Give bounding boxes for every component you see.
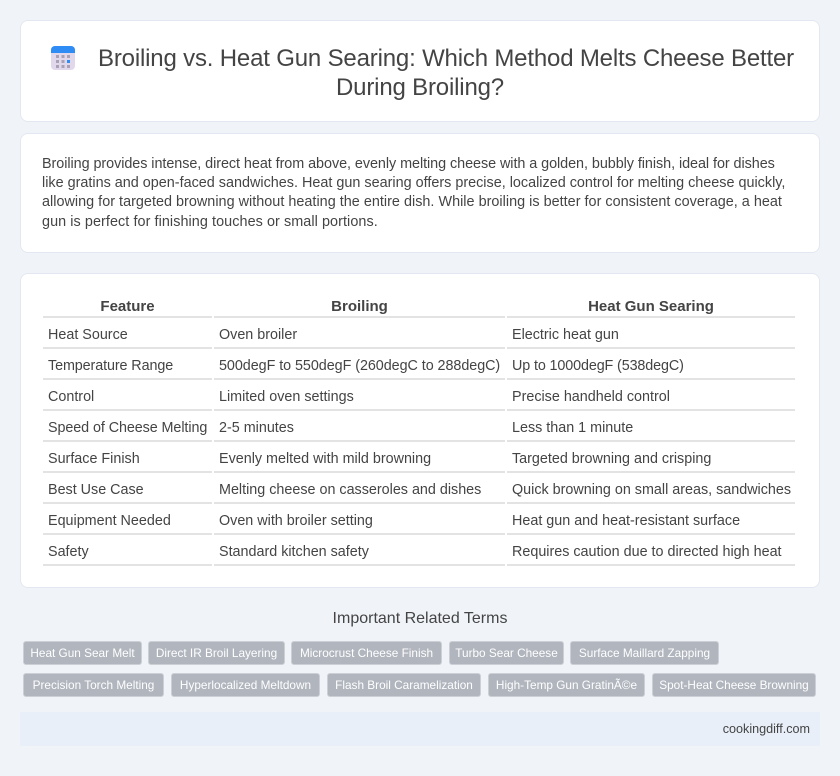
comparison table: Melting cheese on casseroles and dishes xyxy=(219,482,481,498)
comparison table: Precise handheld control xyxy=(512,389,670,405)
comparison table: Oven broiler xyxy=(219,327,297,343)
tag: Heat Gun Sear Melt xyxy=(30,646,135,660)
comparison table: Standard kitchen safety xyxy=(219,544,369,560)
title xyxy=(98,45,794,101)
comparison table: Evenly melted with mild browning xyxy=(219,451,431,467)
comparison table: 500degF to 550degF (260degC to 288degC) xyxy=(219,358,500,374)
comparison table: Heat Source xyxy=(48,327,128,343)
tag: Direct IR Broil Layering xyxy=(156,646,277,660)
comparison table: Quick browning on small areas, sandwiches xyxy=(512,482,791,498)
comparison table: Temperature Range xyxy=(48,358,173,374)
intro text: allowing for targeted browning without heating the entire dish. While broiling is better for consistent coverage, a heat xyxy=(42,194,782,210)
tag: Turbo Sear Cheese xyxy=(455,646,558,660)
related terms tags xyxy=(23,641,816,697)
comparison table: Limited oven settings xyxy=(219,389,354,405)
tag: Microcrust Cheese Finish xyxy=(300,646,433,660)
tag xyxy=(148,641,285,665)
tag xyxy=(652,673,816,697)
comparison table: 2-5 minutes xyxy=(219,420,294,436)
header: Broiling: Broiling xyxy=(331,298,388,315)
footer bar xyxy=(20,712,820,746)
tag: High-Temp Gun GratinÃ©e xyxy=(496,678,637,692)
icon: calendar xyxy=(51,46,75,70)
intro text xyxy=(42,156,785,230)
tag xyxy=(449,641,564,665)
comparison table: Best Use Case xyxy=(48,482,144,498)
comparison table: Targeted browning and crisping xyxy=(512,451,711,467)
header: Heat Gun Searing: Heat Gun Searing xyxy=(588,298,714,315)
tag: Surface Maillard Zapping xyxy=(579,646,710,660)
comparison table: Surface Finish xyxy=(48,451,140,467)
comparison table: Electric heat gun xyxy=(512,327,619,343)
tag: Flash Broil Caramelization xyxy=(335,678,473,692)
comparison table: Control xyxy=(48,389,94,405)
intro panel xyxy=(20,133,820,253)
comparison table: Up to 1000degF (538degC) xyxy=(512,358,684,374)
tag xyxy=(23,673,164,697)
tag xyxy=(488,673,645,697)
tag: Hyperlocalized Meltdown xyxy=(180,678,311,692)
header panel xyxy=(20,20,820,122)
comparison table xyxy=(43,298,795,566)
header: Feature: Feature xyxy=(100,298,155,315)
title: During Broiling? xyxy=(336,74,504,101)
comparison table: Oven with broiler setting xyxy=(219,513,373,529)
comparison table: Requires caution due to directed high heat xyxy=(512,544,782,560)
comparison table: Less than 1 minute xyxy=(512,420,633,436)
comparison table: Equipment Needed xyxy=(48,513,171,529)
tag xyxy=(570,641,719,665)
comparison table: Speed of Cheese Melting xyxy=(48,420,207,436)
tag xyxy=(23,641,142,665)
comparison panel xyxy=(20,273,820,588)
tag xyxy=(291,641,442,665)
footer source: cookingdiff.com xyxy=(723,722,810,736)
comparison table: Safety xyxy=(48,544,89,560)
intro text: Broiling provides intense, direct heat from above, evenly melting cheese with a golden, bubbly finish, ideal for dishes xyxy=(42,156,775,172)
intro text: like gratins and open-faced sandwiches. Heat gun searing offers precise, localized control for melting cheese quickly, xyxy=(42,175,785,191)
intro text: gun is perfect for finishing touches or small portions. xyxy=(42,214,378,230)
related terms heading: Important Related Terms xyxy=(333,610,507,627)
tag: Spot-Heat Cheese Browning xyxy=(659,678,809,692)
title: Broiling vs. Heat Gun Searing: Which Method Melts Cheese Better xyxy=(98,45,794,72)
tag xyxy=(171,673,320,697)
tag: Precision Torch Melting xyxy=(33,678,154,692)
tag xyxy=(327,673,481,697)
comparison table: Heat gun and heat-resistant surface xyxy=(512,513,740,529)
